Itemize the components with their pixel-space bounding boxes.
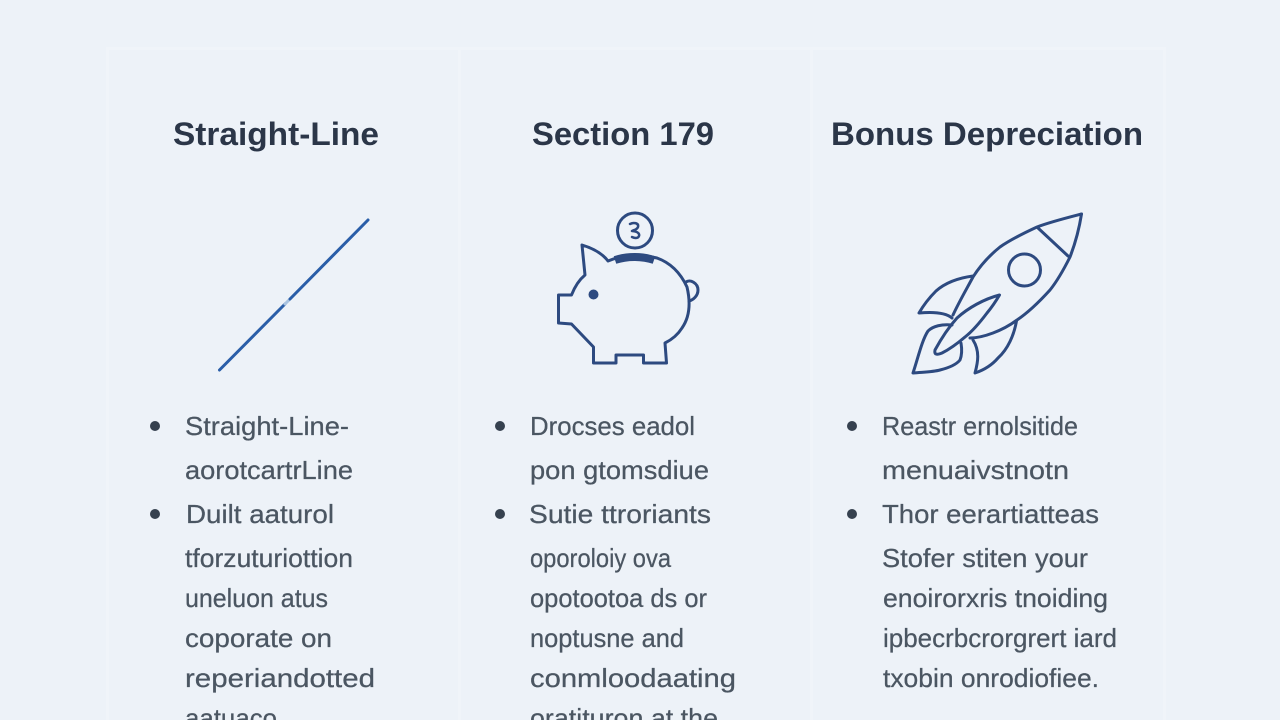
bullet list: Straight-Line: aorotcartrLine xyxy=(185,455,353,485)
bullet list: Bonus Depreciation: enoirorxris tnoiding xyxy=(883,583,1108,613)
panel: Section 179 xyxy=(460,48,812,720)
bullet list: Straight-Line: tforzuturiottion xyxy=(185,543,353,573)
bullet list: Straight-Line: reperiandotted xyxy=(185,663,375,693)
icon: piggy bank with coin xyxy=(558,213,698,363)
bullet list: Straight-Line: uneluon atus xyxy=(185,583,328,613)
bullet list: Straight-Line xyxy=(150,411,375,720)
panel: Straight-Line xyxy=(108,48,460,720)
bullet list: Section 179: opotootoa ds or xyxy=(530,583,707,613)
bullet list: Bonus Depreciation: menuaivstnotn xyxy=(882,455,1069,485)
bullet list: Section 179: conmloodaating xyxy=(530,663,736,693)
bullet list: Bonus Depreciation: ipbecrbcrorgrert iard xyxy=(883,623,1117,653)
icon: straight diagonal line xyxy=(220,220,368,370)
bullet list: Straight-Line: Duilt aaturol xyxy=(186,499,334,529)
bullet list: Section 179: noptusne and xyxy=(530,623,684,653)
bullet list: Bonus Depreciation: txobin onrodiofiee. xyxy=(883,663,1099,693)
bullet list: Bonus Depreciation xyxy=(847,411,1117,693)
icon: rocket xyxy=(913,214,1082,373)
bullet list: Section 179 xyxy=(495,411,736,720)
heading: Bonus Depreciation: Bonus Depreciation xyxy=(831,116,1143,152)
bullet list: Bonus Depreciation: Reastr ernolsitide xyxy=(882,411,1078,441)
bullet list: Section 179: oporoloiy ova xyxy=(530,543,671,573)
bullet list: Section 179: pon gtomsdiue xyxy=(530,455,709,485)
bullet list: Straight-Line: Straight-Line- xyxy=(185,411,349,441)
bullet list: Bonus Depreciation: Thor eerartiatteas xyxy=(882,499,1099,529)
heading: Section 179: Section 179 xyxy=(532,116,714,152)
bullet list: Section 179: Sutie ttroriants xyxy=(529,499,711,529)
bullet list: Section 179: Drocses eadol xyxy=(530,411,695,441)
heading: Straight-Line: Straight-Line xyxy=(173,116,379,152)
bullet list: Straight-Line: coporate on xyxy=(185,623,332,653)
bullet list: Bonus Depreciation: Stofer stiten your xyxy=(882,543,1088,573)
panel: Bonus Depreciation xyxy=(812,48,1164,720)
